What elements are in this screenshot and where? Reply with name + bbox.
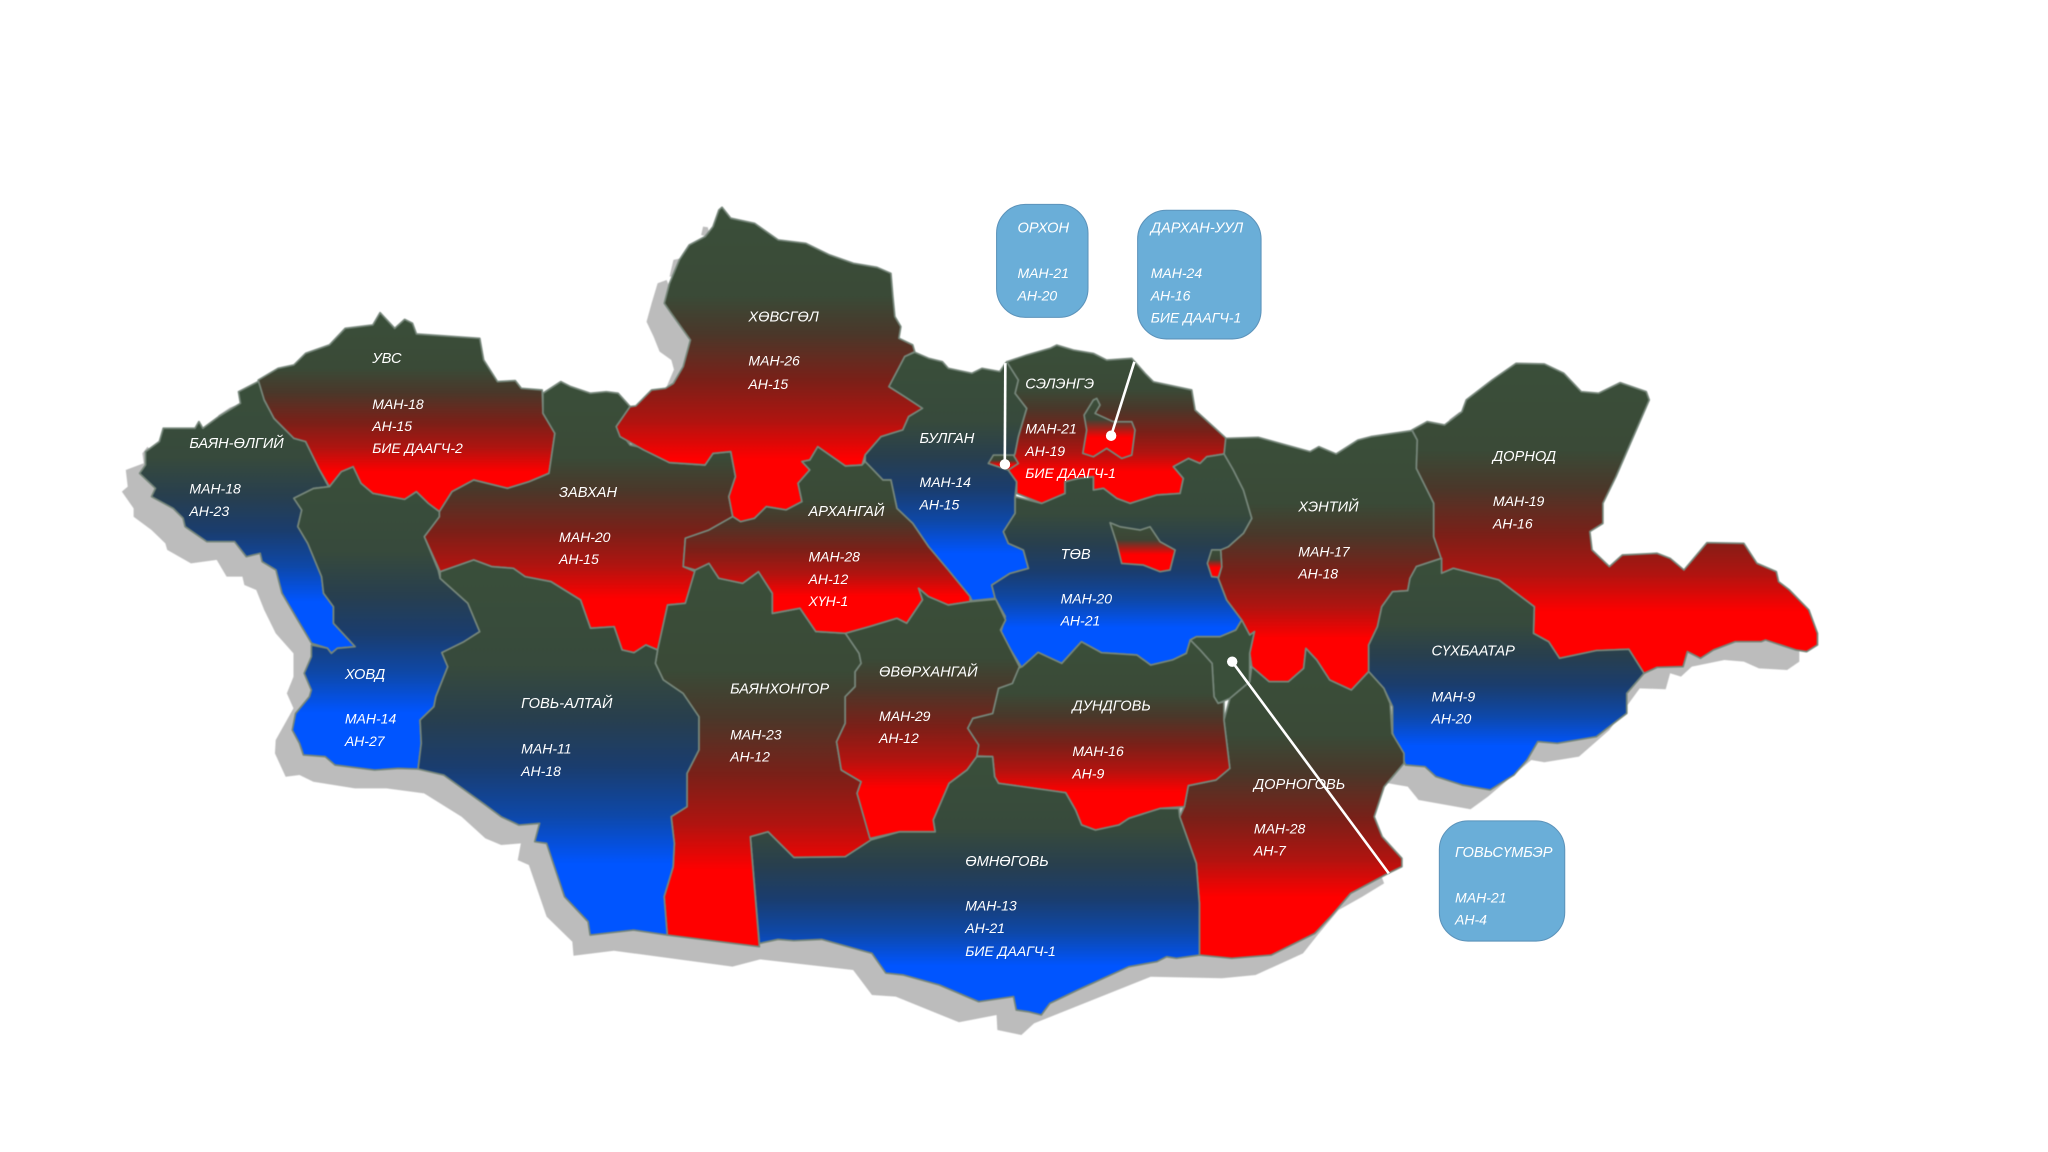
label: Omnogovi: БИЕ ДААГЧ-1 [965,943,1056,959]
region: Dornogovi [1180,648,1404,958]
label: Khovsgol: МАН-26 [748,353,800,369]
label: Selenge: АН-19 [1024,443,1065,459]
region: Bayankhongor [655,563,871,947]
label: Tov: ТӨВ [1061,547,1091,563]
label: Zavkhan: МАН-20 [559,529,611,545]
label: Zavkhan: ЗАВХАН [559,485,617,501]
region: Orkhon [988,455,1018,470]
label: Dornod: ДОРНОД [1493,449,1556,465]
label: Bulgan: АН-15 [919,496,959,512]
label: Zavkhan: АН-15 [558,551,599,567]
label: Omnogovi: ӨМНӨГОВЬ [965,854,1049,870]
label: Khentii: МАН-17 [1298,543,1351,559]
label: Dundgovi: МАН-16 [1072,743,1124,759]
label: Omnogovi: МАН-13 [965,897,1017,913]
label: Sukhbaatar: АН-20 [1431,711,1471,727]
callout: Orkhon: ОРХОН [1017,220,1069,236]
label: Arkhangai: АН-12 [807,571,848,587]
label: Khovd: АН-27 [344,733,386,749]
label: Sukhbaatar: МАН-9 [1432,688,1475,704]
callout: Govisumber: МАН-21 [1455,890,1506,906]
map of aimags [122,207,1817,1035]
region: Tov [992,454,1252,668]
label: Arkhangai: МАН-28 [808,549,860,565]
label: Govi-Altai: ГОВЬ-АЛТАЙ [521,696,612,712]
region: Darkhan-Uul [1083,398,1135,458]
label: Dundgovi: ДУНДГОВЬ [1072,699,1151,715]
callout: Govisumber: АН-4 [1454,912,1487,928]
region: Govisumber [1190,620,1254,703]
label: Omnogovi: АН-21 [964,920,1005,936]
leader line: Darkhan-Uul [1106,362,1134,441]
region: Omnogovi [750,757,1199,1015]
label: Ovorkhangai: АН-12 [878,730,919,746]
label: Uvs: МАН-18 [372,396,424,412]
label: Bayankhongor: МАН-23 [730,726,782,742]
label: Bayan-Olgii: МАН-18 [189,481,241,497]
label: Tov: МАН-20 [1061,590,1112,606]
label: Khovsgol: АН-15 [747,376,788,392]
label: Dornogovi: ДОРНОГОВЬ [1254,777,1345,793]
leader line: Orkhon [1000,363,1010,470]
region: Ovorkhangai [837,588,1019,838]
label: Uvs: БИЕ ДААГЧ-2 [372,440,463,456]
label: Dornod: АН-16 [1492,515,1533,531]
label: Khentii: ХЭНТИЙ [1298,499,1359,515]
label: Selenge: БИЕ ДААГЧ-1 [1025,465,1116,481]
region: Bayan-Olgii [140,381,355,653]
callout: Darkhan-Uul: МАН-24 [1151,265,1202,281]
region: Nalaikh [1207,550,1222,577]
label: Bulgan: МАН-14 [920,474,971,490]
label: Dundgovi: АН-9 [1071,765,1104,781]
region: Ulaanbaatar [1110,523,1175,572]
label: Ovorkhangai: ӨВӨРХАНГАЙ [879,665,978,681]
callout: Darkhan-Uul: ДАРХАН-УУЛ [1151,220,1243,236]
label: Uvs: УВС [372,351,402,367]
label: Selenge: СЭЛЭНГЭ [1025,377,1094,393]
label: Bayankhongor: АН-12 [729,748,770,764]
label: Arkhangai: ХҮН-1 [807,593,848,609]
callout: Darkhan-Uul [1138,210,1261,339]
callout: Govisumber [1439,821,1565,941]
callout: Darkhan-Uul: БИЕ ДААГЧ-1 [1151,310,1241,326]
label: Bulgan: БУЛГАН [920,431,974,447]
region: Bulgan [865,352,1028,601]
region: Sukhbaatar [1369,558,1644,790]
label: Arkhangai: АРХАНГАЙ [808,504,884,520]
label: Uvs: АН-15 [371,418,412,434]
region: Selenge [1007,345,1226,503]
callout: Orkhon: МАН-21 [1017,265,1069,281]
region: Khovsgol [616,207,923,522]
map shadow [122,227,1799,1035]
region: Arkhangai [683,447,970,633]
callout: Darkhan-Uul: АН-16 [1150,287,1191,303]
label: Dornod: МАН-19 [1493,493,1545,509]
label: Khovd: ХОВД [345,667,385,683]
label: Khovsgol: ХӨВСГӨЛ [748,309,819,325]
label: Khentii: АН-18 [1297,566,1338,582]
label: Bayankhongor: БАЯНХОНГОР [730,682,829,698]
label: Dornogovi: АН-7 [1253,843,1287,859]
leader line: Govisumber [1227,656,1389,873]
label: Bayan-Olgii: БАЯН-ӨЛГИЙ [189,436,284,452]
callout: Orkhon: АН-20 [1016,287,1057,303]
label: Govi-Altai: МАН-11 [521,741,572,757]
region: Dundgovi [968,640,1230,830]
label: Ovorkhangai: МАН-29 [879,708,931,724]
label: Selenge: МАН-21 [1025,421,1077,437]
region: Uvs [258,313,555,512]
label: Bayan-Olgii: АН-23 [188,503,229,519]
label: Dornogovi: МАН-28 [1254,820,1306,836]
region: Khovd [292,467,480,770]
region: Zavkhan [424,382,735,653]
label: Sukhbaatar: СҮХБААТАР [1432,644,1515,660]
region: Khentii [1218,431,1441,690]
label: Khovd: МАН-14 [345,711,396,727]
region: Govi-Altai [418,560,699,935]
label: Tov: АН-21 [1060,613,1100,629]
label: Govi-Altai: АН-18 [520,763,561,779]
region: Dornod [1412,363,1817,673]
callout: Govisumber: ГОВЬСҮМБЭР [1455,845,1553,861]
callout: Orkhon [997,204,1088,317]
